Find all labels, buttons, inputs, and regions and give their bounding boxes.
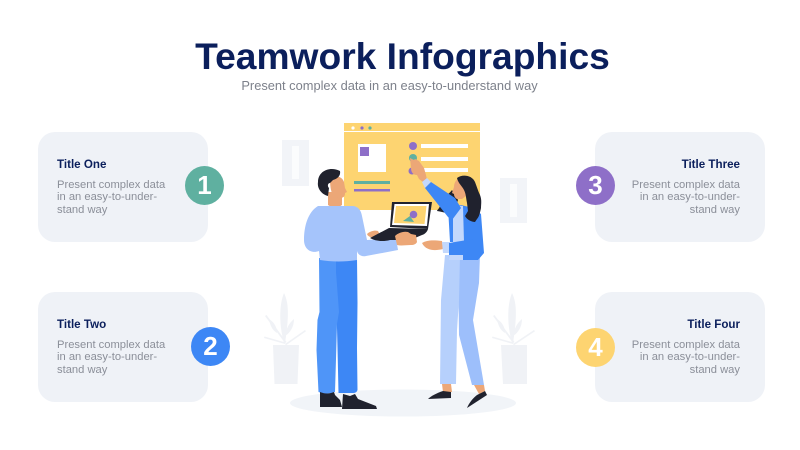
woman shoes	[428, 384, 487, 408]
title two text	[57, 338, 166, 376]
woman hair back	[437, 190, 458, 214]
title three text	[632, 178, 740, 216]
badge 1: 1	[197, 170, 212, 200]
badge 2: 2	[203, 331, 218, 361]
title two heading: Title Two	[57, 318, 106, 330]
woman pointing arm	[410, 158, 461, 220]
title three heading: Title Three	[682, 158, 740, 170]
subtitle: Present complex data in an easy-to-understand way	[241, 78, 538, 93]
panel: title one	[38, 132, 208, 242]
man	[304, 169, 398, 409]
panel: title two	[38, 292, 208, 402]
badge 3: 3	[588, 170, 603, 200]
title: Teamwork Infographics	[195, 35, 610, 77]
plant right	[492, 293, 535, 384]
title one heading: Title One	[57, 158, 106, 170]
man shoes	[320, 392, 377, 409]
title three text: in an easy-to-under-	[640, 191, 740, 203]
badge 2	[191, 327, 230, 366]
wall frame right	[500, 178, 527, 223]
title two text: Present complex data	[57, 338, 165, 350]
woman jacket	[448, 205, 484, 260]
title two text: stand way	[57, 364, 107, 376]
woman head	[452, 179, 467, 199]
laptop	[367, 202, 432, 245]
title one text: Present complex data	[57, 178, 165, 190]
badge 4	[576, 328, 615, 367]
plant left	[264, 293, 306, 384]
browser window board	[344, 123, 480, 210]
panel: title three	[595, 132, 765, 242]
wall frame left	[282, 140, 309, 186]
woman trousers	[440, 255, 484, 385]
title one text: in an easy-to-under-	[57, 191, 157, 203]
man trousers	[316, 258, 358, 394]
title one text	[57, 178, 166, 216]
woman	[410, 158, 487, 408]
title three text: Present complex data	[632, 178, 740, 190]
title one text: stand way	[57, 204, 107, 216]
woman lower arm	[422, 239, 481, 255]
badge 1	[185, 166, 224, 205]
title four heading: Title Four	[687, 318, 740, 330]
title four text: stand way	[690, 364, 740, 376]
badge 4: 4	[588, 332, 603, 362]
badge 3	[576, 166, 615, 205]
title two text: in an easy-to-under-	[57, 351, 157, 363]
panel: title four	[595, 292, 765, 402]
title four text: in an easy-to-under-	[640, 351, 740, 363]
floor shadow	[290, 390, 516, 416]
title four text: Present complex data	[632, 338, 740, 350]
title three text: stand way	[690, 204, 740, 216]
title four text	[632, 338, 740, 376]
